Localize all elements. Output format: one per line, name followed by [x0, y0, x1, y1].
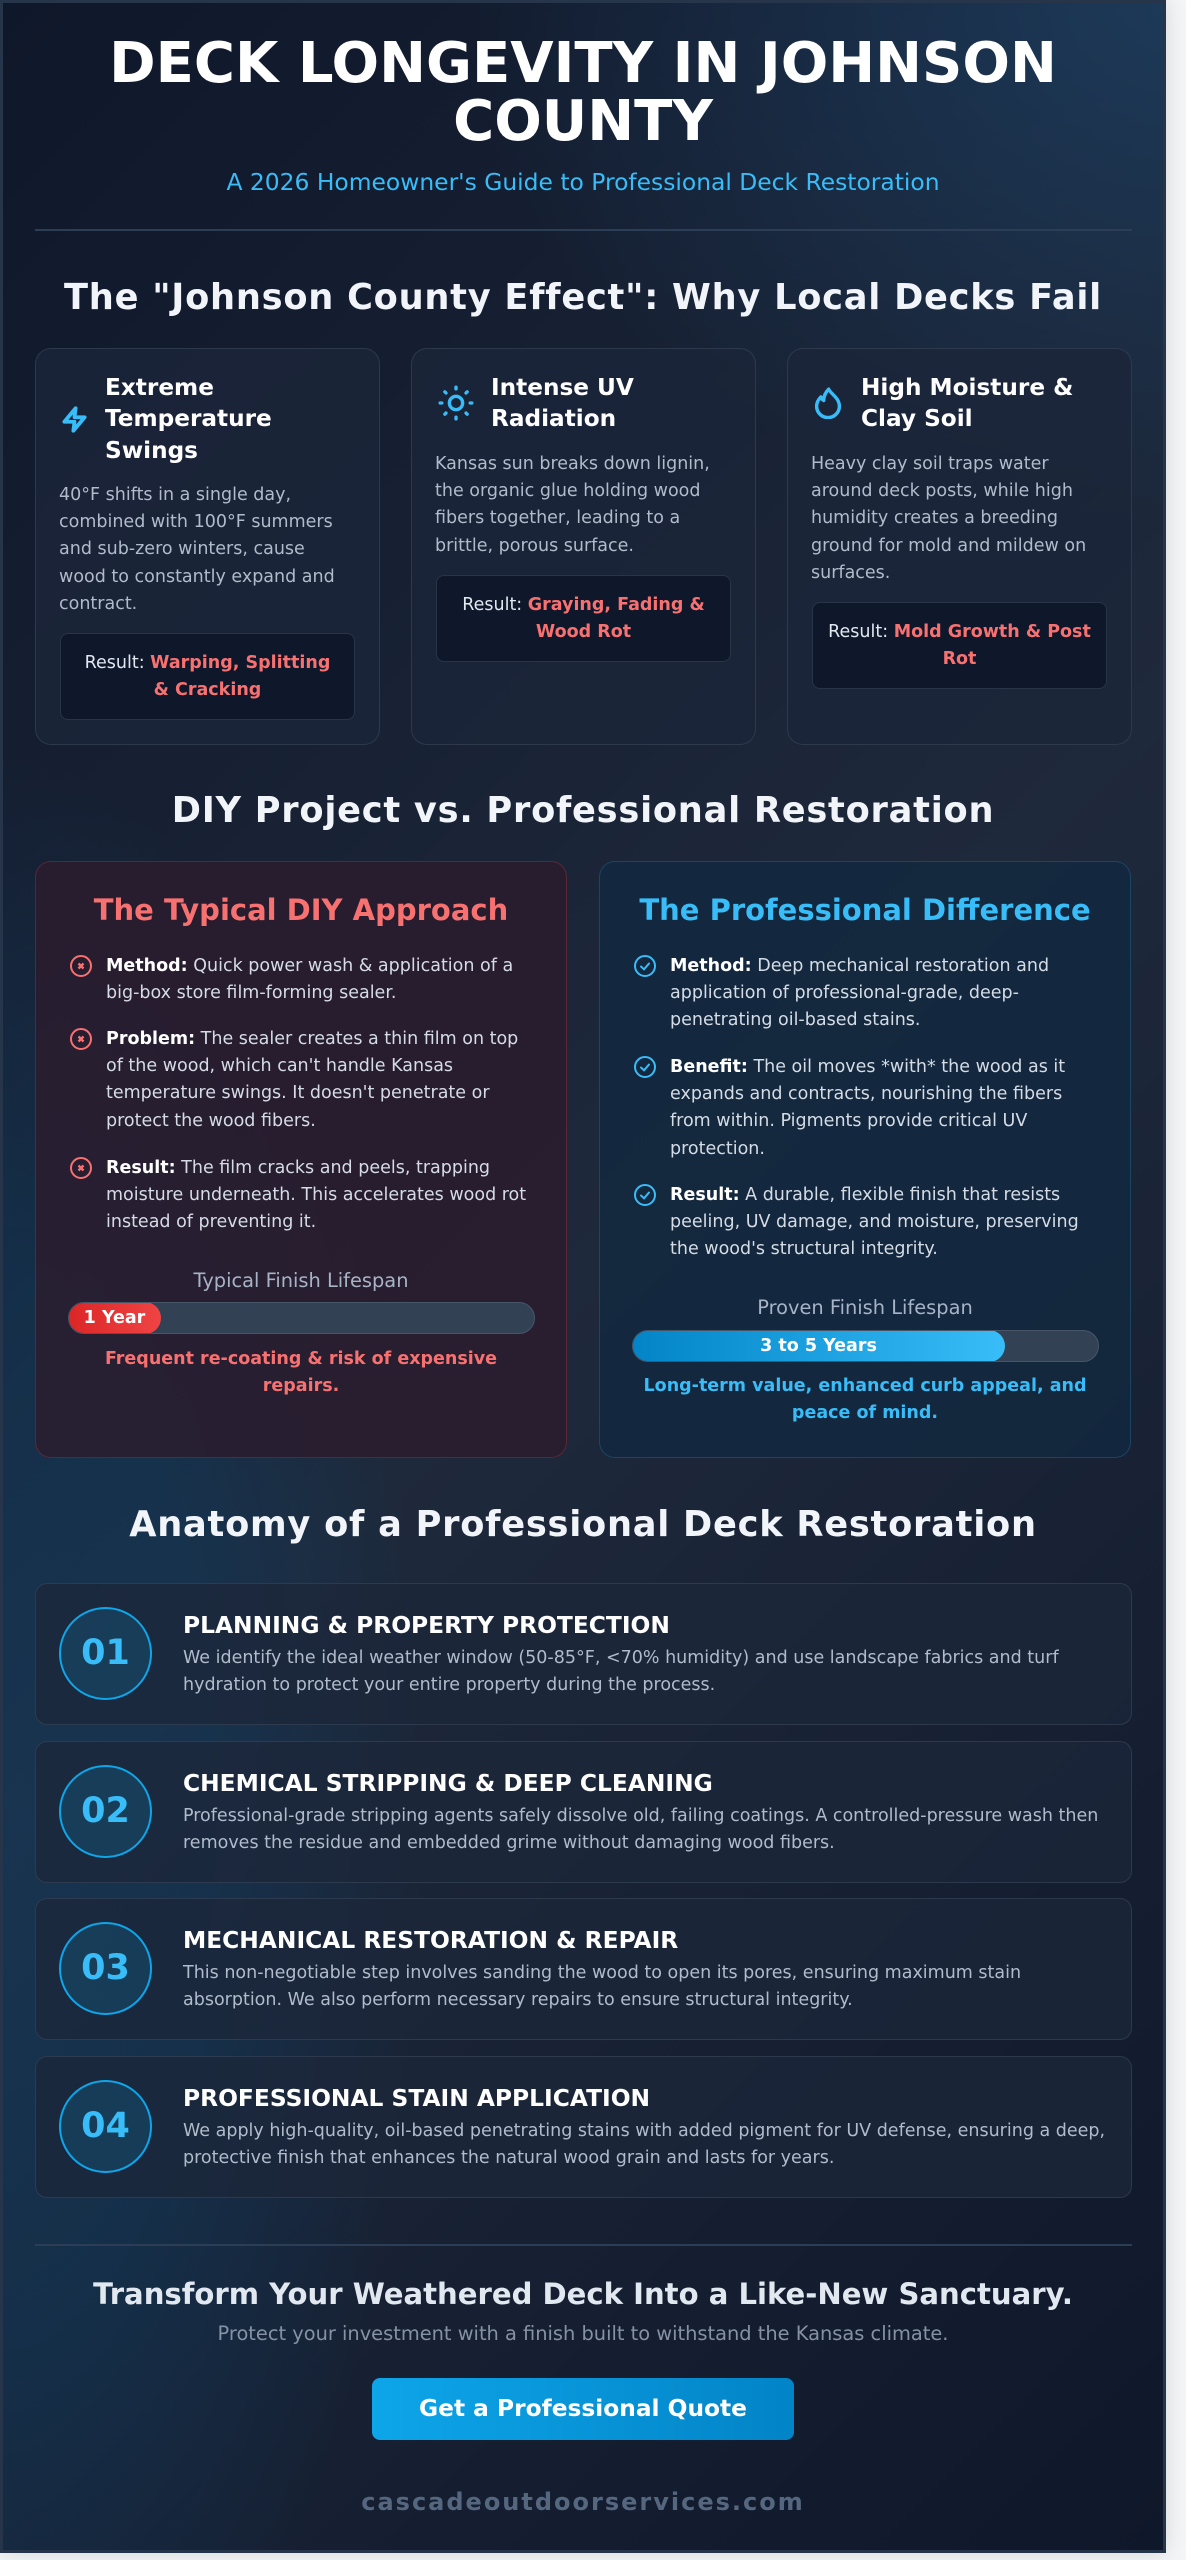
- step number: 01: [81, 1633, 130, 1673]
- button: get a quote: [372, 2378, 794, 2440]
- heading: anatomy: Anatomy of a Professional Deck Restoration: [129, 1504, 1037, 1545]
- footer website: cascadeoutdoorservices.com: [361, 2488, 805, 2516]
- lifespan caption: repairs.: [263, 1376, 339, 1396]
- card heading: [491, 374, 634, 432]
- bar fill: 1 Year: [84, 1308, 145, 1328]
- card heading: High Moisture &: [861, 374, 1073, 401]
- card description: humidity creates a breeding: [811, 508, 1058, 528]
- button: get a quote: Get a Professional Quote: [419, 2395, 747, 2422]
- step 3: [35, 1898, 1132, 2040]
- step description: hydration to protect your entire property during the process.: [183, 1675, 715, 1695]
- bar fill: 3 to 5 Years: [760, 1336, 877, 1356]
- lifespan label: Proven Finish Lifespan: [757, 1296, 973, 1319]
- step title: MECHANICAL RESTORATION & REPAIR: [183, 1926, 678, 1954]
- step number: 03: [81, 1948, 130, 1988]
- heading: DIY vs professional: DIY Project vs. Professional Restoration: [172, 790, 994, 831]
- bar fill: [632, 1330, 1005, 1362]
- step description: [183, 1648, 1059, 1695]
- icon: flame: [814, 387, 842, 419]
- list item: benefit: from within. Pigments provide critical UV: [670, 1111, 1027, 1131]
- step title: PLANNING & PROPERTY PROTECTION: [183, 1611, 670, 1639]
- list item: benefit: [670, 1057, 1065, 1159]
- call to action text: Protect your investment with a finish built to withstand the Kansas climate.: [218, 2322, 948, 2345]
- result box: Result: Warping, Splitting: [85, 653, 330, 673]
- list item: problem: temperature swings. It doesn't penetrate or: [106, 1083, 490, 1103]
- step title: PROFESSIONAL STAIN APPLICATION: [183, 2084, 650, 2112]
- title: DECK LONGEVITY IN JOHNSON: [109, 31, 1057, 96]
- result box: & Cracking: [154, 680, 261, 700]
- card description: surfaces.: [811, 563, 890, 583]
- step 4: [35, 2056, 1132, 2198]
- card description: wood to constantly expand and: [59, 567, 335, 587]
- list item: result: peeling, UV damage, and moisture, preserving: [670, 1212, 1079, 1232]
- step 2: [35, 1740, 1132, 1882]
- bar fill: [68, 1302, 161, 1334]
- list item: result: moisture underneath. This accelerates wood rot: [106, 1185, 526, 1205]
- step number: 02: [81, 1790, 130, 1830]
- list item: result: [106, 1158, 526, 1232]
- icon: x circle: [70, 1157, 92, 1179]
- list item: problem: protect the wood fibers.: [106, 1111, 316, 1131]
- icon: lightning bolt: [62, 406, 87, 433]
- step description: [182, 1963, 1021, 2010]
- card heading: Intense UV: [491, 374, 634, 401]
- step description: protective finish that enhances the natural wood grain and lasts for years.: [183, 2148, 834, 2168]
- icon: check circle: [634, 1056, 656, 1078]
- panel: high moisture and clay soil: [787, 348, 1132, 745]
- card description: fibers together, leading to a: [435, 508, 680, 528]
- icon: x circle: [70, 955, 92, 977]
- card description: Kansas sun breaks down lignin,: [435, 454, 710, 474]
- card heading: [861, 374, 1073, 432]
- step number: [59, 1607, 152, 1700]
- step description: [183, 1806, 1098, 1853]
- title: [109, 31, 1057, 154]
- result box: Wood Rot: [536, 622, 631, 642]
- card description: the organic glue holding wood: [435, 481, 700, 501]
- panel: extreme temperature swings: [35, 348, 380, 745]
- card description: [811, 454, 1086, 583]
- card description: and sub-zero winters, cause: [59, 539, 305, 559]
- list item: method: big-box store film-forming sealer.: [106, 983, 396, 1003]
- result box: Rot: [943, 649, 976, 669]
- step number: 04: [81, 2106, 130, 2146]
- list item: benefit: expands and contracts, nourishing the fibers: [670, 1084, 1062, 1104]
- list item: benefit: protection.: [670, 1139, 765, 1159]
- list item: result: Result: The film cracks and peels, trapping: [106, 1158, 490, 1178]
- card heading: Radiation: [491, 405, 616, 432]
- card heading: Swings: [105, 437, 198, 464]
- card heading: [105, 374, 272, 464]
- lifespan caption: [105, 1349, 497, 1396]
- card description: combined with 100°F summers: [59, 512, 333, 532]
- list item: method: [106, 956, 513, 1003]
- result box: [812, 602, 1107, 689]
- icon: sun: [438, 386, 474, 420]
- lifespan caption: [644, 1376, 1086, 1423]
- card description: Heavy clay soil traps water: [811, 454, 1049, 474]
- step title: CHEMICAL STRIPPING & DEEP CLEANING: [183, 1768, 713, 1796]
- card description: [435, 454, 710, 556]
- step 1: [35, 1583, 1132, 1725]
- panel: intense UV radiation: [411, 348, 756, 745]
- lifespan caption: Frequent re-coating & risk of expensive: [105, 1349, 497, 1369]
- list item: result: the wood's structural integrity.: [670, 1239, 938, 1259]
- result box: [436, 575, 731, 662]
- panel: typical DIY approach: [35, 861, 567, 1458]
- step description: removes the residue and embedded grime without damaging wood fibers.: [183, 1833, 835, 1853]
- list item: benefit: Benefit: The oil moves *with* the wood as it: [670, 1057, 1065, 1077]
- panel heading: The Professional Difference: [639, 893, 1091, 927]
- call to action heading: Transform Your Weathered Deck Into a Like-New Sanctuary.: [93, 2277, 1073, 2311]
- step description: We apply high-quality, oil-based penetrating stains with added pigment for UV defense, ensuring a deep,: [183, 2120, 1105, 2140]
- result box: Result: Mold Growth & Post: [828, 622, 1091, 642]
- list item: result: [670, 1185, 1079, 1259]
- list item: problem: of the wood, which can't handle Kansas: [106, 1056, 453, 1076]
- list item: method: application of professional-grade, deep-: [670, 983, 1019, 1003]
- step number: [59, 1922, 152, 2015]
- card description: contract.: [59, 594, 137, 614]
- lifespan caption: peace of mind.: [792, 1403, 938, 1423]
- subtitle: A 2026 Homeowner's Guide to Professional Deck Restoration: [226, 168, 940, 196]
- lifespan bar: 3 to 5 years: [632, 1330, 1099, 1362]
- step description: This non-negotiable step involves sanding the wood to open its pores, ensuring maximum stain: [183, 1963, 1021, 1983]
- panel: the professional difference: [599, 861, 1131, 1458]
- title: COUNTY: [453, 89, 713, 154]
- card description: brittle, porous surface.: [435, 536, 634, 556]
- result box: Result: Graying, Fading &: [462, 595, 705, 615]
- step description: [183, 2120, 1105, 2168]
- list item: problem: Problem: The sealer creates a thin film on top: [106, 1029, 518, 1049]
- step description: Professional-grade stripping agents safely dissolve old, failing coatings. A controlled-pressure wash then: [183, 1806, 1098, 1826]
- step number: [59, 1764, 152, 1858]
- result box: [60, 633, 355, 720]
- icon: x circle: [70, 1028, 92, 1050]
- lifespan bar: 1 year: [68, 1302, 535, 1334]
- list item: method: Method: Deep mechanical restoration and: [670, 956, 1049, 976]
- card description: [59, 485, 335, 614]
- card description: 40°F shifts in a single day,: [59, 485, 291, 505]
- list item: result: instead of preventing it.: [106, 1212, 316, 1232]
- heading: Johnson County Effect: The "Johnson County Effect": Why Local Decks Fail: [64, 277, 1102, 318]
- icon: check circle: [634, 955, 656, 977]
- list item: problem: [106, 1029, 518, 1131]
- step description: We identify the ideal weather window (50-85°F, <70% humidity) and use landscape fabrics and turf: [183, 1648, 1059, 1668]
- panel heading: The Typical DIY Approach: [94, 893, 508, 927]
- list item: method: Method: Quick power wash & application of a: [106, 956, 513, 976]
- icon: check circle: [634, 1184, 656, 1206]
- list item: method: [670, 956, 1049, 1030]
- list item: result: Result: A durable, flexible finish that resists: [670, 1185, 1060, 1205]
- list item: method: penetrating oil-based stains.: [670, 1010, 920, 1030]
- card description: around deck posts, while high: [811, 481, 1073, 501]
- lifespan label: Typical Finish Lifespan: [194, 1268, 408, 1292]
- card description: ground for mold and mildew on: [811, 536, 1086, 556]
- step description: absorption. We also perform necessary repairs to ensure structural integrity.: [183, 1990, 853, 2010]
- lifespan caption: Long-term value, enhanced curb appeal, and: [644, 1376, 1086, 1396]
- card heading: Extreme: [105, 374, 214, 401]
- step number: [59, 2080, 152, 2172]
- card heading: Clay Soil: [861, 405, 973, 432]
- card heading: Temperature: [105, 405, 272, 432]
